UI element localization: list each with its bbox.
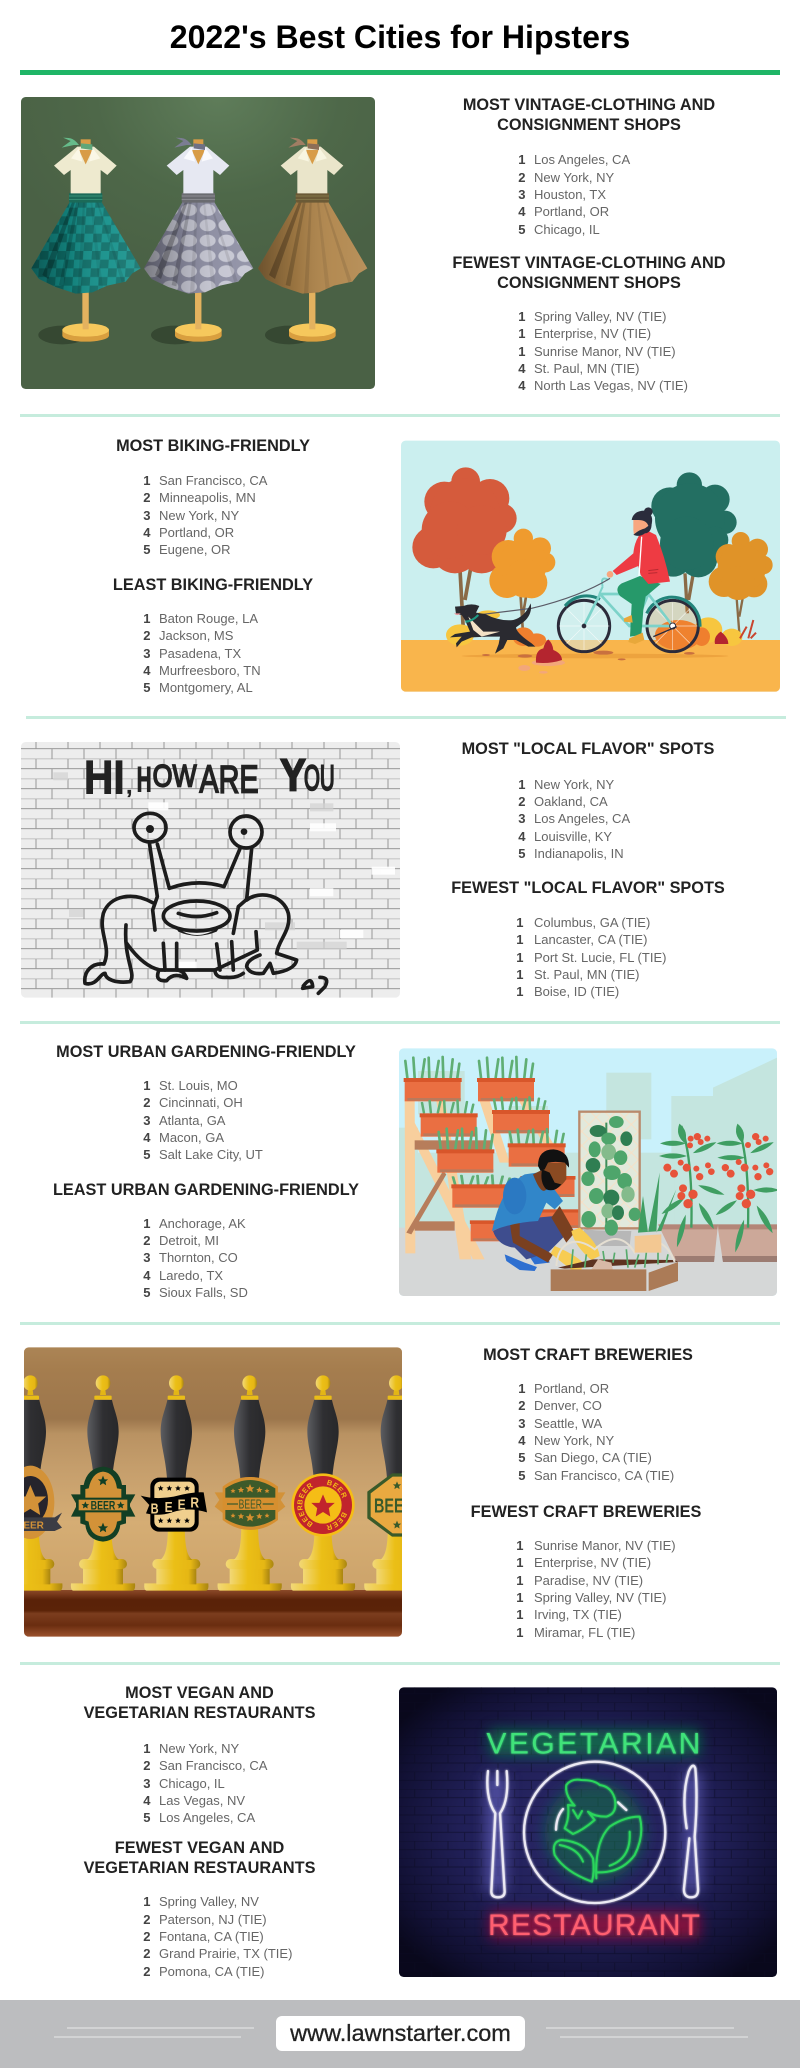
list: most vintage: Chicago, IL	[534, 222, 600, 237]
list: most vintage	[518, 152, 630, 237]
list: most local flavor: 4	[518, 829, 526, 844]
list: least gardening: Thornton, CO	[159, 1250, 238, 1265]
list: fewest vintage	[518, 309, 688, 393]
heading: most vegan	[84, 1684, 315, 1722]
list: least gardening: Anchorage, AK	[159, 1216, 246, 1231]
taps row	[24, 1375, 402, 1591]
list: fewest vintage: 1	[518, 326, 526, 341]
list: most breweries: San Francisco, CA (TIE)	[534, 1468, 674, 1483]
list: least biking: Montgomery, AL	[159, 680, 253, 695]
list: most gardening: St. Louis, MO	[159, 1078, 238, 1093]
badge: black ribbon	[141, 1478, 207, 1532]
mural text	[86, 758, 334, 798]
list: most breweries: San Diego, CA (TIE)	[534, 1450, 652, 1465]
list: fewest breweries: 1	[516, 1625, 524, 1640]
list: most vegan: San Francisco, CA	[159, 1758, 267, 1773]
list: fewest breweries	[516, 1538, 676, 1640]
list: fewest breweries: 1	[516, 1590, 524, 1605]
list: least gardening: 4	[143, 1268, 150, 1283]
frog drawing	[85, 813, 327, 993]
list: fewest vegan: 2	[143, 1912, 150, 1927]
heading: most vintage: CONSIGNMENT SHOPS	[497, 116, 681, 134]
list: fewest local flavor: 1	[516, 932, 524, 947]
badge: star: EER	[23, 1521, 45, 1532]
illustration: rooftop gardener	[399, 1048, 777, 1296]
panel: vintage clothing	[21, 96, 726, 393]
badge: black ribbon: R	[190, 1496, 199, 1512]
gardener	[492, 1149, 600, 1271]
list: least biking: 5	[143, 680, 150, 695]
title underline	[20, 70, 780, 75]
list: fewest local flavor: 1	[516, 984, 524, 999]
list: fewest vegan: Paterson, NJ (TIE)	[159, 1912, 267, 1927]
list: fewest local flavor: Boise, ID (TIE)	[534, 984, 619, 999]
list: fewest local flavor: Columbus, GA (TIE)	[534, 915, 650, 930]
buildings	[398, 1058, 777, 1229]
list: fewest vintage: Spring Valley, NV (TIE)	[534, 309, 666, 324]
list: least gardening: Laredo, TX	[159, 1268, 223, 1283]
list: most vegan: 5	[143, 1810, 150, 1825]
illustration: three dresses on stands	[21, 97, 375, 389]
list: fewest breweries: 1	[516, 1538, 524, 1553]
list: fewest vegan: 2	[143, 1929, 150, 1944]
list: most gardening: 1	[143, 1078, 150, 1093]
badge: black ribbon: E	[178, 1497, 186, 1513]
list: fewest vegan: Pomona, CA (TIE)	[159, 1964, 264, 1979]
list: fewest vintage: 4	[518, 378, 526, 393]
list: fewest breweries: Enterprise, NV (TIE)	[534, 1555, 651, 1570]
list: most breweries: Denver, CO	[534, 1398, 602, 1413]
list: most gardening: 3	[143, 1113, 150, 1128]
illustration: brick wall mural	[21, 742, 400, 998]
list: fewest vegan: 1	[143, 1894, 150, 1909]
mural text: H	[137, 761, 152, 800]
list: most biking: 1	[143, 473, 150, 488]
neon plate and cutlery	[487, 1762, 698, 1903]
list: least gardening: 2	[143, 1233, 150, 1248]
heading: least gardening: LEAST URBAN GARDENING-FRIENDLY	[53, 1181, 359, 1199]
ground details	[462, 639, 728, 674]
heading: least biking: LEAST BIKING-FRIENDLY	[113, 576, 313, 594]
mural text: Y	[280, 750, 306, 801]
badge: star	[24, 1466, 62, 1539]
list: most biking: New York, NY	[159, 508, 239, 523]
panel: craft breweries	[24, 1346, 701, 1640]
illustration: neon vegetarian restaurant sign	[399, 1687, 777, 1977]
list: most gardening: 5	[143, 1147, 150, 1162]
list: most breweries: Seattle, WA	[534, 1416, 602, 1431]
list: most breweries: Portland, OR	[534, 1381, 609, 1396]
list: most vintage: 5	[518, 222, 526, 237]
heading: most vintage	[463, 96, 715, 134]
ladder rack	[405, 1089, 555, 1259]
list: least gardening: Detroit, MI	[159, 1233, 219, 1248]
list: most gardening: Macon, GA	[159, 1130, 224, 1145]
list: fewest vintage: St. Paul, MN (TIE)	[534, 361, 639, 376]
website pill	[276, 2016, 525, 2051]
list: most local flavor: 3	[518, 811, 526, 826]
list: least biking	[143, 611, 261, 695]
list: most vegan: 1	[143, 1741, 150, 1756]
list: fewest local flavor: 1	[516, 915, 524, 930]
list: most biking: Minneapolis, MN	[159, 490, 256, 505]
heading: most breweries: MOST CRAFT BREWERIES	[483, 1346, 693, 1364]
bicycle	[558, 578, 700, 652]
list: most breweries: 5	[518, 1468, 526, 1483]
tree: orange	[489, 529, 555, 628]
list: most biking	[143, 473, 268, 557]
footer band	[0, 2000, 800, 2068]
list: most local flavor: Louisville, KY	[534, 829, 612, 844]
list: most vintage: 3	[518, 187, 526, 202]
list: fewest breweries: Spring Valley, NV (TIE)	[534, 1590, 666, 1605]
mural text: OU	[304, 759, 335, 798]
heading: fewest breweries: FEWEST CRAFT BREWERIES	[471, 1503, 701, 1521]
mural text: ARE	[199, 757, 259, 801]
heading: fewest vegan: FEWEST VEGAN AND	[115, 1839, 284, 1857]
heading: fewest vintage	[452, 254, 726, 292]
badge: red round: BEER BEER BEER BEER	[297, 1480, 347, 1530]
list: least biking: 3	[143, 646, 150, 661]
list: most breweries: 4	[518, 1433, 526, 1448]
glows	[485, 1730, 701, 1938]
list: most breweries: 2	[518, 1398, 526, 1413]
list: most vegan: 4	[143, 1793, 150, 1808]
list: most breweries: New York, NY	[534, 1433, 614, 1448]
list: most vegan: Chicago, IL	[159, 1776, 225, 1791]
leash	[480, 578, 610, 615]
list: most vintage: 2	[518, 170, 526, 185]
list: least gardening: 1	[143, 1216, 150, 1231]
heading: most gardening: MOST URBAN GARDENING-FRIENDLY	[56, 1043, 356, 1061]
list: fewest local flavor: 1	[516, 950, 524, 965]
badge: black ribbon: B	[151, 1501, 159, 1517]
badge: green crest	[71, 1467, 135, 1542]
planters	[404, 1057, 582, 1241]
illustration: beer taps	[24, 1347, 402, 1637]
heading: fewest vintage: FEWEST VINTAGE-CLOTHING AND	[452, 254, 726, 272]
list: least biking: 1	[143, 611, 150, 626]
list: fewest vintage: North Las Vegas, NV (TIE)	[534, 378, 688, 393]
decorative lines left	[54, 2027, 254, 2038]
list: fewest breweries: Sunrise Manor, NV (TIE)	[534, 1538, 676, 1553]
list: fewest vegan: 2	[143, 1964, 150, 1979]
list: most vintage: 4	[518, 204, 526, 219]
list: most vegan: New York, NY	[159, 1741, 239, 1756]
list: most breweries: 3	[518, 1416, 526, 1431]
list: least biking: Pasadena, TX	[159, 646, 241, 661]
list: fewest breweries: 1	[516, 1607, 524, 1622]
list: fewest breweries: Paradise, NV (TIE)	[534, 1573, 643, 1588]
list: least gardening	[143, 1216, 248, 1300]
list: most breweries	[518, 1381, 674, 1483]
heading: most biking: MOST BIKING-FRIENDLY	[116, 437, 310, 455]
list: most biking: 2	[143, 490, 150, 505]
tree: green	[651, 472, 737, 613]
badge: orange and green	[215, 1477, 285, 1530]
neon word: restaurant: RESTAURANT	[488, 1909, 700, 1942]
list: least biking: 2	[143, 628, 150, 643]
heading: most local flavor: MOST "LOCAL FLAVOR" SPOTS	[462, 740, 714, 758]
list: most vegan	[143, 1741, 268, 1825]
title: 2022's Best Cities for Hipsters	[170, 19, 630, 55]
list: fewest breweries: 1	[516, 1573, 524, 1588]
list: most local flavor: Oakland, CA	[534, 794, 608, 809]
dress: grey dotted	[144, 138, 253, 344]
list: most vegan: 2	[143, 1758, 150, 1773]
mural text: OW	[153, 758, 197, 794]
heading: most vegan: VEGETARIAN RESTAURANTS	[84, 1704, 315, 1722]
list: most vegan: Los Angeles, CA	[159, 1810, 255, 1825]
list: fewest vegan: 2	[143, 1946, 150, 1961]
list: most breweries: 5	[518, 1450, 526, 1465]
list: most local flavor: Los Angeles, CA	[534, 811, 630, 826]
list: fewest vegan: Spring Valley, NV	[159, 1894, 259, 1909]
list: most gardening: Salt Lake City, UT	[159, 1147, 263, 1162]
dog	[450, 603, 535, 654]
list: least gardening: Sioux Falls, SD	[159, 1285, 248, 1300]
list: fewest vintage: 1	[518, 344, 526, 359]
list: fewest vintage: 4	[518, 361, 526, 376]
tree: red	[412, 467, 517, 630]
list: fewest vegan: Fontana, CA (TIE)	[159, 1929, 264, 1944]
badge: green crest: BEER	[91, 1500, 116, 1513]
list: most biking: 3	[143, 508, 150, 523]
list: least biking: Murfreesboro, TN	[159, 663, 261, 678]
panel: vegan restaurants	[84, 1684, 777, 1979]
illustration: cyclist walking dog	[401, 440, 780, 692]
list: most vintage: New York, NY	[534, 170, 614, 185]
cyclist	[607, 507, 670, 644]
list: most local flavor: New York, NY	[534, 777, 614, 792]
panel: local flavor	[21, 740, 725, 999]
list: most vintage: Portland, OR	[534, 204, 609, 219]
list: most local flavor: 1	[518, 777, 526, 792]
list: most local flavor: Indianapolis, IN	[534, 846, 624, 861]
list: fewest local flavor: Lancaster, CA (TIE)	[534, 932, 647, 947]
list: least gardening: 3	[143, 1250, 150, 1265]
heading: fewest vegan	[84, 1839, 315, 1877]
bar top	[22, 1590, 404, 1639]
badge: black ribbon: E	[165, 1500, 173, 1516]
list: fewest vintage: 1	[518, 309, 526, 324]
tomato plants	[638, 1123, 780, 1262]
heading: most vegan: MOST VEGAN AND	[125, 1684, 274, 1702]
list: least biking: Jackson, MS	[159, 628, 233, 643]
list: most local flavor	[518, 777, 630, 861]
list: most biking: 5	[143, 542, 150, 557]
list: fewest breweries: Miramar, FL (TIE)	[534, 1625, 635, 1640]
dress: teal checked	[31, 138, 141, 344]
list: most biking: Portland, OR	[159, 525, 234, 540]
dress: brown pleated	[258, 138, 367, 344]
list: most gardening: 4	[143, 1130, 150, 1145]
list: most biking: Eugene, OR	[159, 542, 231, 557]
panel: urban gardening	[53, 1043, 777, 1300]
list: fewest local flavor: St. Paul, MN (TIE)	[534, 967, 639, 982]
neon vegetables	[554, 1780, 641, 1882]
heading: fewest vintage: CONSIGNMENT SHOPS	[497, 274, 681, 292]
tree: amber	[709, 532, 773, 633]
list: least biking: 4	[143, 663, 150, 678]
list: most vegan: 3	[143, 1776, 150, 1791]
list: fewest local flavor: 1	[516, 967, 524, 982]
badge: orange and green: BEER	[239, 1498, 262, 1512]
mural text: ,	[126, 772, 132, 798]
list: fewest vintage: Enterprise, NV (TIE)	[534, 326, 651, 341]
list: fewest local flavor: Port St. Lucie, FL (TIE)	[534, 950, 666, 965]
list: most gardening	[143, 1078, 263, 1162]
list: fewest vegan	[143, 1894, 292, 1979]
neon word: vegetarian: VEGETARIAN	[486, 1727, 700, 1760]
list: most gardening: Atlanta, GA	[159, 1113, 225, 1128]
list: most biking: San Francisco, CA	[159, 473, 267, 488]
list: least biking: Baton Rouge, LA	[159, 611, 258, 626]
list: fewest local flavor	[516, 915, 666, 999]
website pill: www.lawnstarter.com	[290, 2020, 511, 2046]
decorative lines right	[546, 2027, 748, 2038]
heading: most vintage: MOST VINTAGE-CLOTHING AND	[463, 96, 715, 114]
mural text: HI	[84, 751, 125, 804]
list: most gardening: Cincinnati, OH	[159, 1095, 243, 1110]
heading: fewest vegan: VEGETARIAN RESTAURANTS	[84, 1859, 315, 1877]
trellis with climber	[579, 1112, 641, 1246]
list: most local flavor: 5	[518, 846, 526, 861]
list: most vegan: Las Vegas, NV	[159, 1793, 245, 1808]
badge: green hexagon	[367, 1473, 402, 1537]
list: most gardening: 2	[143, 1095, 150, 1110]
list: most breweries: 1	[518, 1381, 526, 1396]
bushes	[446, 610, 756, 650]
list: fewest breweries: Irving, TX (TIE)	[534, 1607, 622, 1622]
list: most vintage: 1	[518, 152, 526, 167]
list: most biking: 4	[143, 525, 150, 540]
list: fewest vegan: Grand Prairie, TX (TIE)	[159, 1946, 292, 1961]
panel: biking	[113, 437, 780, 695]
heading: fewest local flavor: FEWEST "LOCAL FLAVOR" SPOTS	[451, 879, 725, 897]
list: most vintage: Los Angeles, CA	[534, 152, 630, 167]
list: most local flavor: 2	[518, 794, 526, 809]
list: most vintage: Houston, TX	[534, 187, 606, 202]
raised bed	[551, 1234, 678, 1291]
list: fewest breweries: 1	[516, 1555, 524, 1570]
list: fewest vintage: Sunrise Manor, NV (TIE)	[534, 344, 676, 359]
list: least gardening: 5	[143, 1285, 150, 1300]
